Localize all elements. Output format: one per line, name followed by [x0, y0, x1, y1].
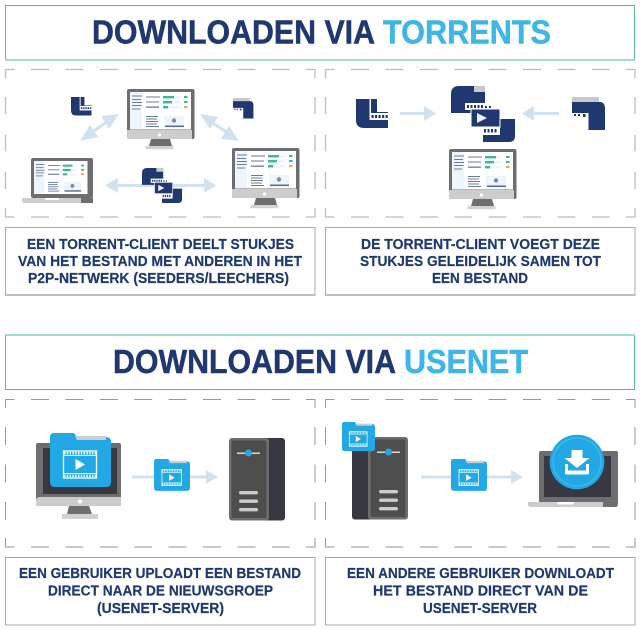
- panel: usenet upload: [6, 400, 315, 547]
- arrow: into file from right: [522, 106, 559, 121]
- caption: torrent client assembles: STUKJES GELEIDELIJK SAMEN TOT: [360, 254, 601, 270]
- icon: monitor right: [232, 148, 300, 208]
- icon: download badge: [550, 435, 604, 489]
- caption: user downloads: USENET-SERVER: [423, 601, 537, 617]
- caption: torrent client shares: EEN TORRENT-CLIENT DEELT STUKJES: [27, 237, 294, 253]
- icon: monitor: [449, 149, 516, 209]
- icon: upload monitor: [36, 443, 121, 519]
- icon: assembled file: [451, 86, 515, 142]
- panel: usenet download: [326, 400, 635, 547]
- arrow: laptop to right monitor: [105, 178, 216, 193]
- caption: user uploads: DIRECT NAAR DE NIEUWSGROEP: [48, 584, 273, 600]
- icon: file fragment right: [233, 98, 253, 118]
- panel: torrent assembly: [326, 70, 635, 217]
- caption: torrent client assembles: EEN BESTAND: [432, 271, 528, 287]
- icon: usenet server: [229, 438, 285, 520]
- icon: laptop: [528, 451, 618, 507]
- arrow: top monitor to right monitor: [200, 114, 239, 141]
- arrow: download: [421, 470, 523, 484]
- icon: folder on server: [342, 422, 375, 451]
- title box: usenet: [5, 334, 635, 390]
- caption: torrent client assembles: DE TORRENT-CLIENT VOEGT DEZE: [361, 237, 600, 253]
- icon: file fragment left large: [356, 99, 388, 128]
- icon: large folder: [50, 433, 111, 487]
- icon: monitor top: [127, 89, 194, 149]
- arrow: into file from left: [400, 106, 436, 121]
- caption: torrent client shares: P2P-NETWERK (SEEDERS/LEECHERS): [28, 271, 289, 287]
- icon: laptop left: [22, 158, 93, 203]
- heading: downloaden via usenet: USENET: [404, 343, 528, 380]
- icon: file fragment left: [71, 97, 91, 116]
- caption: torrent client assembles: [325, 228, 635, 296]
- panel: torrent network: [6, 70, 315, 217]
- heading: downloaden via torrents: DOWNLOADEN VIA: [92, 14, 375, 50]
- heading: downloaden via torrents: TORRENTS: [383, 14, 551, 50]
- title box: torrents: [5, 6, 635, 61]
- icon: file fragment right large: [572, 97, 605, 130]
- caption: torrent client shares: VAN HET BESTAND MET ANDEREN IN HET: [18, 254, 302, 270]
- caption: user uploads: [6, 558, 315, 625]
- icon: file pieces exchanged: [142, 168, 182, 203]
- caption: user uploads: (USENET-SERVER): [97, 601, 224, 617]
- caption: user downloads: [326, 558, 635, 625]
- heading: downloaden via usenet: DOWNLOADEN VIA: [113, 343, 396, 380]
- icon: usenet server mirrored: [352, 437, 408, 520]
- caption: user downloads: HET BESTAND DIRECT VAN DE: [373, 584, 588, 600]
- caption: user uploads: EEN GEBRUIKER UPLOADT EEN BESTAND: [19, 566, 301, 582]
- arrow: laptop to top monitor: [80, 114, 119, 141]
- arrow: upload: [132, 470, 218, 484]
- heading: downloaden via torrents: [92, 14, 551, 50]
- icon: moving folder: [451, 459, 487, 491]
- caption: user downloads: EEN ANDERE GEBRUIKER DOWNLOADT: [347, 566, 614, 582]
- icon: moving folder: [154, 459, 190, 491]
- caption: torrent client shares: [5, 228, 315, 296]
